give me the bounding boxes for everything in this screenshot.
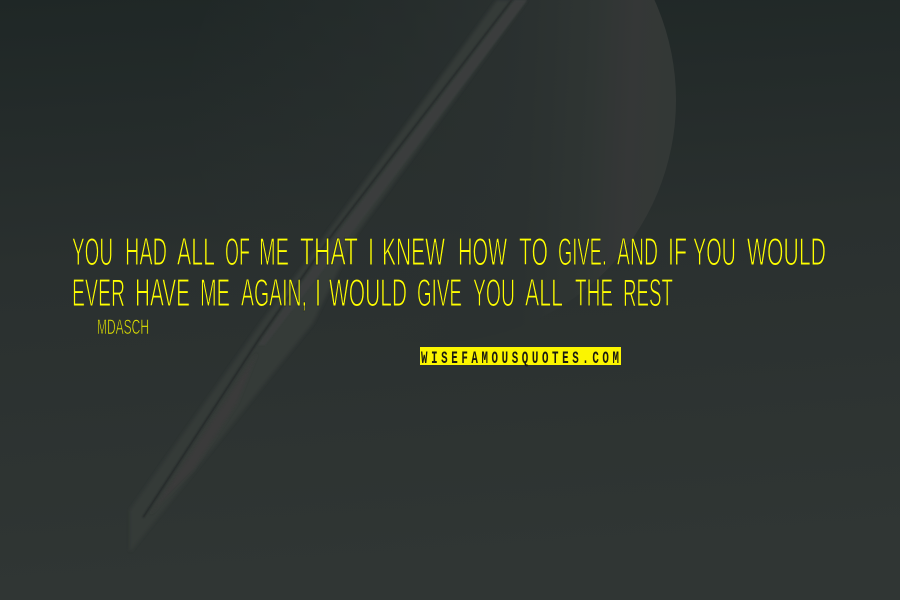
quote text: REST [623,272,673,315]
quote text: ALL [525,272,563,315]
quote text: ME [259,231,289,274]
quote text: YOU [693,231,736,274]
quote text: HAD [125,231,167,274]
quote text: WOULD [329,272,407,315]
planet ring [130,0,527,552]
quote text: YOU [72,231,113,274]
quote text [72,231,826,315]
quote text: AGAIN, [241,272,307,315]
quote text: I [368,231,374,274]
quote text: THE [575,272,613,315]
quote text: EVER [72,272,125,315]
quote text: WOULD [747,231,826,274]
quote text: HOW [458,231,507,274]
quote text: KNEW [382,231,445,274]
quote text: ALL [177,231,215,274]
quote text: AND [617,231,658,274]
quote text: IF [668,231,687,274]
planet [190,0,676,343]
quote text: YOU [473,272,515,315]
quote text: HAVE [135,272,190,315]
quote text: THAT [300,231,358,274]
quote text: GIVE [417,272,462,315]
quote text: TO [519,231,548,274]
watermark logo: WISEFAMOUSQUOTES.COM [421,350,619,369]
quote text: I [315,272,321,315]
quote text: GIVE. [558,231,607,274]
author name: MDASCH [97,316,149,339]
quote text: OF [225,231,250,274]
quote text: ME [200,272,230,315]
